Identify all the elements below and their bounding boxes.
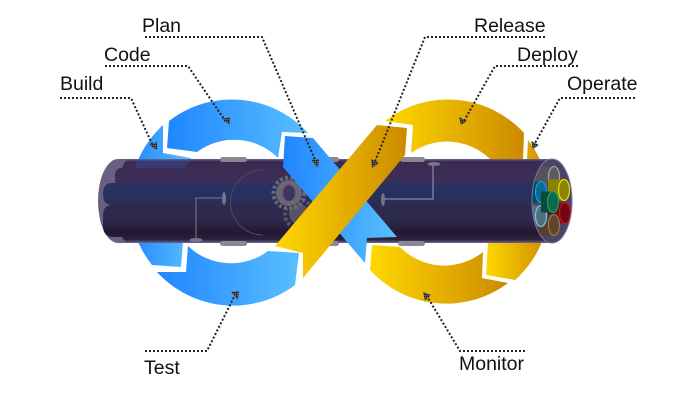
inner cable bundle <box>528 166 570 236</box>
right end face <box>532 159 572 243</box>
label: Deploy: Deploy <box>517 44 578 66</box>
ribbon: Plan <box>283 136 397 263</box>
label: Deploy <box>459 44 578 125</box>
label: Plan <box>142 15 319 168</box>
label: Test: Test <box>144 357 180 379</box>
label: Operate <box>531 73 637 149</box>
tube body <box>115 159 552 243</box>
cable brown <box>536 214 560 236</box>
ring segment: Code <box>167 100 308 158</box>
cable green <box>541 192 558 212</box>
left connector <box>190 192 226 242</box>
label: Code: Code <box>104 44 151 66</box>
blue cable core <box>103 183 140 205</box>
gear small <box>285 200 313 228</box>
ring segment: Monitor <box>370 245 508 304</box>
lower cable core <box>103 205 140 237</box>
clip top right <box>400 157 425 162</box>
label: Code <box>104 44 230 125</box>
ring segment: Build <box>130 125 191 267</box>
ring segment: Test <box>157 246 299 306</box>
label: Build: Build <box>60 73 103 95</box>
cable tube <box>98 157 572 246</box>
label: Operate: Operate <box>567 73 637 95</box>
clip top centre <box>325 157 339 162</box>
label: Plan: Plan <box>142 15 181 37</box>
label: Release <box>371 15 546 168</box>
ring showing through tube <box>135 160 191 168</box>
cable light blue <box>532 204 548 228</box>
clip top left <box>220 157 247 162</box>
arc detail <box>231 170 263 235</box>
right connector <box>381 162 440 206</box>
left end cap <box>98 159 135 243</box>
ring segment: Operate <box>486 140 550 280</box>
label: Monitor <box>423 292 525 375</box>
ring segment: Deploy <box>385 100 524 159</box>
label: Release: Release <box>474 15 546 37</box>
clip bottom right <box>398 241 425 246</box>
cable yellow <box>548 180 570 200</box>
cable blue <box>532 180 548 204</box>
label: Build <box>60 73 157 150</box>
ribbon: Release <box>275 125 407 278</box>
clip bottom centre <box>325 241 339 246</box>
gear large <box>274 178 304 208</box>
clip bottom left <box>220 241 247 246</box>
cable red <box>548 202 570 224</box>
label: Monitor: Monitor <box>459 353 525 375</box>
cable grey <box>530 166 560 188</box>
label: Test <box>144 291 239 379</box>
